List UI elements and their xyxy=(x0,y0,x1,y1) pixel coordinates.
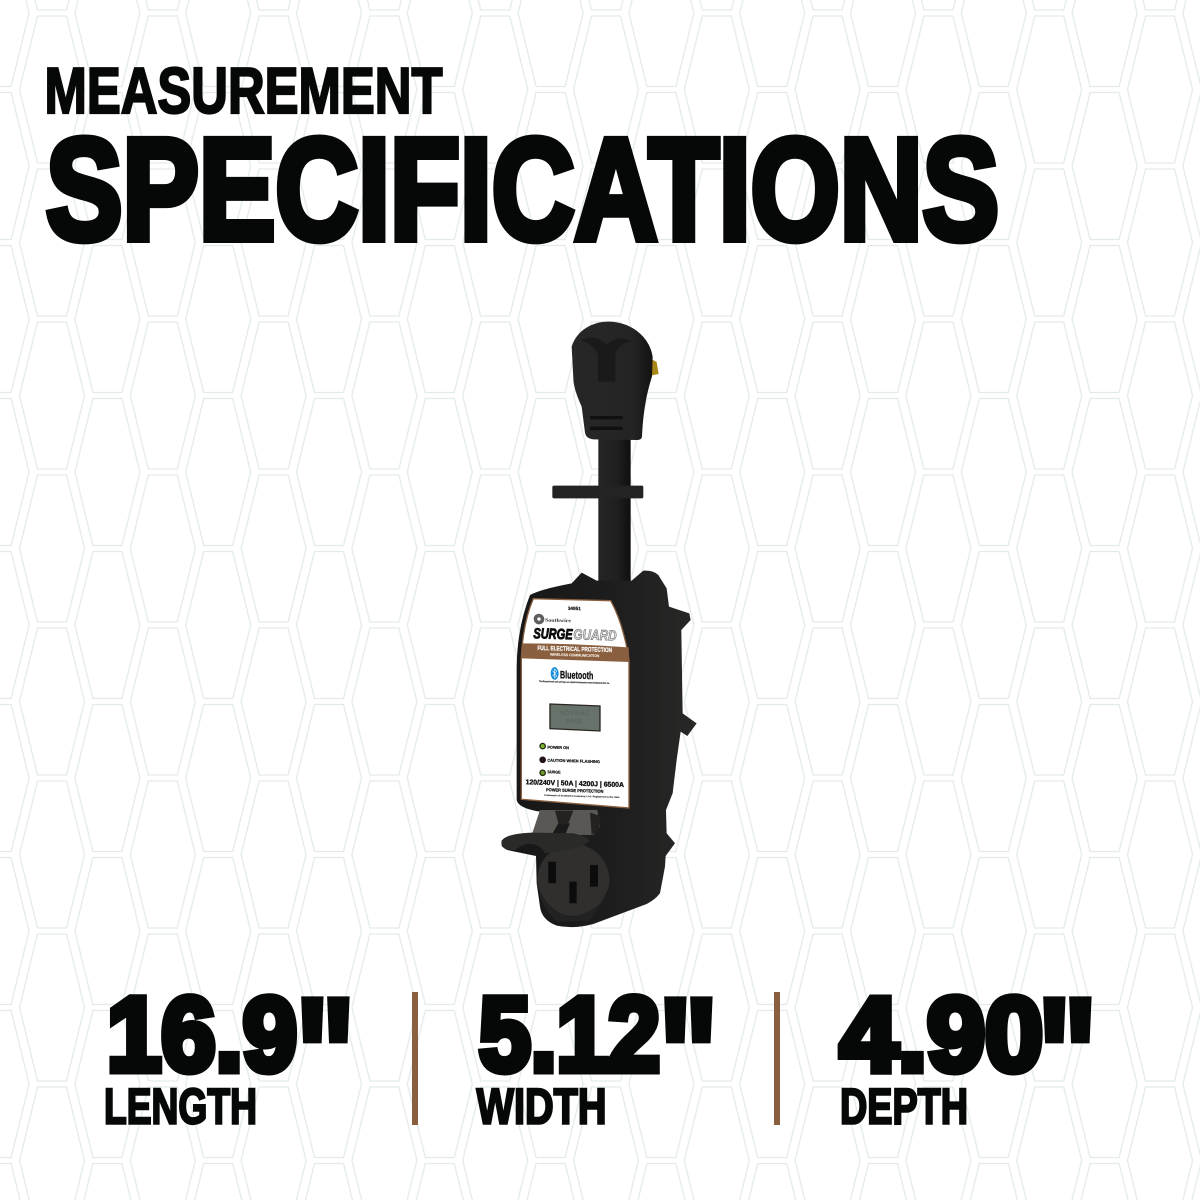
lcd screen: PASS xyxy=(566,719,582,725)
heading: measurement: MEASUREMENT xyxy=(44,54,442,127)
divider left xyxy=(412,992,418,1125)
plug slots xyxy=(590,416,623,430)
model number: 34951 xyxy=(568,606,581,611)
label panel xyxy=(521,599,629,808)
surge led xyxy=(539,769,546,776)
plug head xyxy=(572,322,653,440)
receptacle slots xyxy=(548,862,598,903)
length value: 16.9 xyxy=(107,976,297,1094)
stat: depth xyxy=(840,966,1097,1145)
protection line: POWER SURGE PROTECTION xyxy=(546,787,603,794)
surge text: SURGE xyxy=(547,769,561,775)
plug and cord xyxy=(552,322,659,583)
receptacle face xyxy=(537,844,609,916)
stat: length xyxy=(104,966,355,1145)
lcd screen xyxy=(550,704,600,731)
length label: LENGTH xyxy=(104,1079,257,1135)
length value: " xyxy=(296,966,355,1145)
surge protector body xyxy=(501,571,697,927)
southwire name: Southwire xyxy=(545,619,572,624)
surge word: SURGE xyxy=(533,626,574,643)
stat: width xyxy=(476,966,718,1145)
bluetooth name: Bluetooth xyxy=(560,669,593,682)
ratings: 120/240V | 50A | 4200J | 6500A xyxy=(526,779,624,789)
trademark line: Trademark of Southwire Company, LLC. Registered in the USA. xyxy=(544,794,621,799)
cord xyxy=(598,437,631,583)
length value xyxy=(107,966,355,1145)
body silhouette xyxy=(501,571,697,927)
depth value: " xyxy=(1038,966,1097,1145)
band subline: WIRELESS COMMUNICATION xyxy=(550,653,600,658)
front label xyxy=(521,599,629,808)
caution led xyxy=(539,756,546,763)
width value: " xyxy=(659,966,718,1145)
depth value xyxy=(840,966,1097,1145)
southwire logo xyxy=(534,614,544,625)
product: surge guard device xyxy=(501,322,697,927)
cover hinge xyxy=(532,810,600,835)
lcd screen: NO FAULT xyxy=(560,711,590,717)
bluetooth badge xyxy=(551,667,559,680)
label text block xyxy=(526,605,624,799)
title xyxy=(44,54,999,270)
width value: 5.12 xyxy=(479,976,660,1094)
brown band xyxy=(522,643,629,662)
divider right xyxy=(774,992,780,1125)
plug grip groove xyxy=(580,338,632,382)
brass tab xyxy=(652,359,659,375)
power on led xyxy=(539,743,546,750)
depth value: 4.90 xyxy=(840,976,1043,1094)
cord ring xyxy=(552,486,643,498)
band headline: FULL ELECTRICAL PROTECTION xyxy=(537,645,612,654)
depth label: DEPTH xyxy=(840,1079,968,1135)
guard word: GUARD xyxy=(573,627,617,645)
bluetooth fine print: The Bluetooth word mark and logos are registered trademarks owned by Bluetooth SIG, Inc. xyxy=(539,680,610,685)
receptacle corners xyxy=(537,883,609,922)
caution text: CAUTION WHEN FLASHING xyxy=(547,758,600,764)
receptacle cover flap xyxy=(502,833,589,853)
width value xyxy=(479,966,718,1145)
power on text: POWER ON xyxy=(547,745,569,750)
hinge shadows xyxy=(555,811,601,835)
width label: WIDTH xyxy=(476,1079,606,1135)
